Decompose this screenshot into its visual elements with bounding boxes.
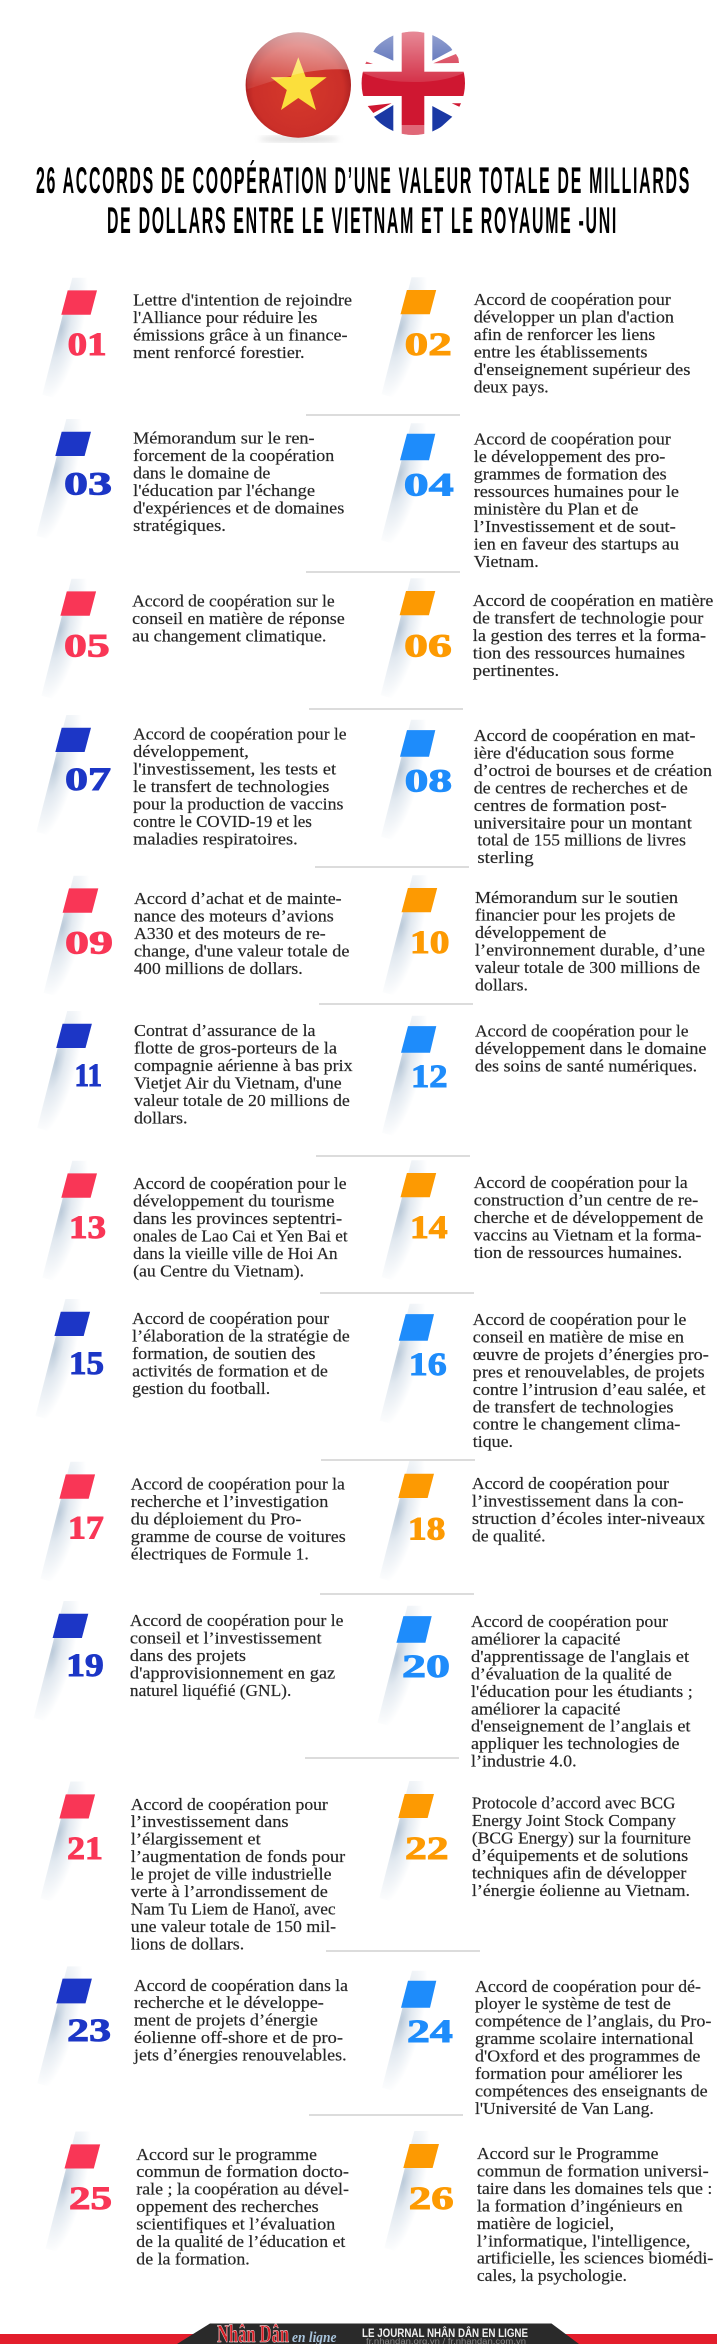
text 24: compétence de l’anglais, du Pro- bbox=[475, 2012, 712, 2031]
text 03: d'expériences et de domaines bbox=[133, 499, 344, 518]
number 13: 13 bbox=[69, 1210, 106, 1246]
agreement 25 bbox=[46, 2132, 349, 2268]
text 26: taire dans les domaines tels que : bbox=[477, 2179, 712, 2198]
agreement 05 bbox=[41, 579, 345, 701]
text 09 bbox=[134, 889, 349, 978]
flag: Vietnam bbox=[246, 28, 351, 142]
text 17: électriques de Formule 1. bbox=[131, 1544, 309, 1563]
agreement 17 bbox=[40, 1462, 346, 1584]
text 20: l'éducation pour les étudiants ; bbox=[471, 1682, 693, 1701]
marker 05 bbox=[60, 591, 96, 616]
text 15: gestion du football. bbox=[132, 1379, 270, 1398]
text 14: construction d’un centre de re- bbox=[474, 1190, 699, 1209]
text 24: compétences des enseignants de bbox=[475, 2082, 708, 2101]
text 17: du déploiement du Pro- bbox=[131, 1510, 302, 1529]
marker 01 bbox=[61, 290, 97, 315]
title bbox=[36, 160, 691, 241]
text 25: de la formation. bbox=[136, 2250, 250, 2269]
text 04 bbox=[474, 430, 680, 571]
text 02: deux pays. bbox=[474, 377, 549, 396]
marker 08 bbox=[400, 730, 435, 757]
number 23: 23 bbox=[67, 2013, 111, 2049]
text 25: de la qualité de l’éducation et bbox=[136, 2232, 346, 2251]
text 09: 400 millions de dollars. bbox=[134, 959, 303, 978]
text 26: la formation d’ingénieurs en bbox=[477, 2196, 683, 2215]
text 10: financier pour les projets de bbox=[475, 905, 675, 924]
text 21: l’augmentation de fonds pour bbox=[131, 1847, 346, 1866]
text 04: le développement des pro- bbox=[474, 447, 666, 466]
text 16: tique. bbox=[473, 1432, 513, 1451]
marker 19 bbox=[53, 1614, 88, 1638]
text 04: Vietnam. bbox=[474, 552, 539, 571]
text 08: ière d'éducation sous forme bbox=[474, 743, 674, 762]
agreement 07 bbox=[36, 715, 347, 848]
text 02: développer un plan d'action bbox=[474, 307, 675, 326]
text 04: l’Investissement et de sout- bbox=[474, 517, 676, 536]
text 10: dollars. bbox=[475, 975, 528, 994]
text 11: dollars. bbox=[134, 1108, 188, 1127]
agreement 12 bbox=[382, 1016, 706, 1138]
text 03: dans le domaine de bbox=[133, 464, 270, 483]
text 21: Accord de coopération pour bbox=[131, 1795, 328, 1814]
text 11 bbox=[134, 1021, 353, 1127]
number 18: 18 bbox=[408, 1511, 445, 1547]
text 13: Accord de coopération pour le bbox=[133, 1174, 347, 1193]
text 10: Mémorandum sur le soutien bbox=[475, 888, 679, 907]
text 02 bbox=[474, 290, 690, 396]
text 13: dans les provinces septentri- bbox=[133, 1209, 342, 1228]
agreement 24 bbox=[382, 1971, 712, 2118]
text 06: de transfert de technologie pour bbox=[473, 608, 704, 627]
text 26: l’informatique, l'intelligence, bbox=[477, 2231, 690, 2250]
text 07: l'investissement, les tests et bbox=[133, 760, 336, 779]
text 14: cherche et de développement de bbox=[474, 1208, 703, 1227]
marker 17 bbox=[59, 1474, 95, 1499]
text 18 bbox=[472, 1474, 706, 1545]
text 19: d'approvisionnement en gaz bbox=[130, 1663, 336, 1682]
text 04: ressources humaines pour le bbox=[474, 482, 679, 501]
text 18: struction d’écoles inter-niveaux bbox=[472, 1509, 706, 1528]
text 24: ployer le système de test de bbox=[475, 1994, 671, 2013]
text 21: verte à l’arrondissement de bbox=[131, 1882, 328, 1901]
text 20: d'enseignement de l’anglais et bbox=[471, 1717, 691, 1736]
text 04: ien en faveur des startups au bbox=[474, 534, 680, 553]
text 24: gramme scolaire international bbox=[475, 2029, 694, 2048]
text 16: pres et renouvelables, de projets bbox=[473, 1362, 705, 1381]
text 13: dans la vieille ville de Hoi An bbox=[133, 1244, 338, 1263]
text 14: tion de ressources humaines. bbox=[474, 1243, 682, 1262]
marker 26 bbox=[403, 2144, 439, 2168]
text 07: le transfert de technologies bbox=[133, 777, 329, 796]
text 21 bbox=[131, 1795, 346, 1953]
marker 10 bbox=[402, 888, 437, 912]
text 02: entre les établissements bbox=[474, 342, 648, 361]
text 17 bbox=[131, 1475, 346, 1564]
text 22: Energy Joint Stock Company bbox=[472, 1811, 676, 1830]
text 02: d'enseignement supérieur des bbox=[474, 360, 690, 379]
marker 22 bbox=[398, 1794, 434, 1818]
agreement 01 bbox=[42, 278, 352, 400]
agreement 14 bbox=[382, 1160, 703, 1282]
text 06: la gestion des terres et la forma- bbox=[473, 626, 706, 645]
text 22: l’énergie éolienne au Vietnam. bbox=[472, 1881, 690, 1900]
text 21: une valeur totale de 150 mil- bbox=[131, 1917, 336, 1936]
text 23: recherche et le développe- bbox=[134, 1993, 324, 2012]
text 03: Mémorandum sur le ren- bbox=[133, 429, 315, 448]
agreement 20 bbox=[377, 1606, 693, 1771]
text 20: améliorer la capacité bbox=[471, 1699, 620, 1718]
text 15: Accord de coopération pour bbox=[132, 1309, 329, 1328]
text 11: valeur totale de 20 millions de bbox=[134, 1091, 350, 1110]
text 17: gramme de course de voitures bbox=[131, 1527, 346, 1546]
text 26: Accord sur le Programme bbox=[477, 2144, 658, 2163]
text 21: l’élargissement et bbox=[131, 1830, 261, 1849]
number 06: 06 bbox=[404, 629, 452, 665]
text 22: Protocole d’accord avec BCG bbox=[472, 1794, 675, 1813]
marker 23 bbox=[56, 1979, 92, 2003]
text 23: ment de projets d’énergie bbox=[134, 2011, 318, 2030]
text 08: Accord de coopération en mat- bbox=[474, 726, 696, 745]
text 26: matière de logiciel, bbox=[477, 2214, 614, 2233]
text 07 bbox=[133, 725, 347, 848]
text 08 bbox=[474, 726, 712, 867]
number 21: 21 bbox=[67, 1831, 103, 1867]
text 05: conseil en matière de réponse bbox=[132, 609, 345, 628]
number 11: 11 bbox=[74, 1058, 102, 1094]
text 11: Contrat d’assurance de la bbox=[134, 1021, 316, 1040]
text 24: l'Université de Van Lang. bbox=[475, 2099, 654, 2118]
text 14: vaccins au Vietnam et la forma- bbox=[474, 1225, 702, 1244]
text 03 bbox=[133, 429, 344, 535]
text 22: d’équipements et de solutions bbox=[472, 1846, 688, 1865]
text 01: ment renforcé forestier. bbox=[133, 343, 305, 362]
text 22 bbox=[472, 1794, 691, 1900]
text 18: Accord de coopération pour bbox=[472, 1474, 669, 1493]
agreement 26 bbox=[384, 2131, 714, 2285]
agreement 21 bbox=[40, 1782, 346, 1953]
text 13 bbox=[133, 1174, 348, 1280]
text 07: pour la production de vaccins bbox=[133, 795, 343, 814]
text 21: Nam Tu Liem de Hanoï, avec bbox=[131, 1900, 336, 1919]
text 14: Accord de coopération pour la bbox=[474, 1173, 688, 1192]
text 20: l’industrie 4.0. bbox=[471, 1752, 577, 1771]
text 01 bbox=[133, 291, 352, 362]
number 22: 22 bbox=[405, 1831, 449, 1867]
text 21: l’investissement dans bbox=[131, 1812, 289, 1831]
text 09: change, d'une valeur totale de bbox=[134, 941, 349, 960]
footer banner bbox=[0, 2321, 717, 2344]
text 21: le projet de ville industrielle bbox=[131, 1865, 332, 1884]
text 17: recherche et l’investigation bbox=[131, 1492, 329, 1511]
marker 09 bbox=[63, 888, 98, 913]
text 16: contre le changement clima- bbox=[473, 1415, 681, 1434]
text 04: Accord de coopération pour bbox=[474, 430, 671, 449]
marker 11 bbox=[56, 1024, 92, 1048]
agreement 09 bbox=[44, 876, 349, 998]
text 25: oppement des recherches bbox=[136, 2197, 319, 2216]
text 10: développement de bbox=[475, 923, 606, 942]
text 19: Accord de coopération pour le bbox=[130, 1611, 343, 1630]
text 17: Accord de coopération pour la bbox=[131, 1475, 345, 1494]
text 07: contre le COVID-19 et les bbox=[133, 812, 312, 831]
text 12 bbox=[475, 1022, 706, 1076]
text 06: tion des ressources humaines bbox=[473, 643, 685, 662]
number 10: 10 bbox=[410, 925, 450, 961]
flag: United Kingdom bbox=[361, 31, 466, 136]
number 02: 02 bbox=[405, 327, 452, 363]
text 01: l'Alliance pour réduire les bbox=[133, 308, 317, 327]
agreement 04 bbox=[381, 423, 680, 571]
text 26 bbox=[477, 2144, 714, 2285]
text 13: onales de Lao Cai et Yen Bai et bbox=[133, 1226, 348, 1245]
marker 06 bbox=[400, 591, 435, 615]
text 25: scientifiques et l’évaluation bbox=[136, 2215, 336, 2234]
text 19 bbox=[130, 1611, 343, 1700]
text 16: Accord de coopération pour le bbox=[473, 1310, 686, 1329]
text 10 bbox=[475, 888, 705, 994]
number 15: 15 bbox=[69, 1346, 104, 1382]
marker 21 bbox=[59, 1794, 95, 1818]
text 12: développement dans le domaine bbox=[475, 1039, 706, 1058]
text 20: appliquer les technologies de bbox=[471, 1734, 679, 1753]
text 24: Accord de coopération pour dé- bbox=[475, 1977, 701, 1996]
text 04: grammes de formation des bbox=[474, 465, 667, 484]
text 09: nance des moteurs d’avions bbox=[134, 906, 334, 925]
text 22: techniques afin de développer bbox=[472, 1863, 687, 1882]
text 24: d'Oxford et des programmes de bbox=[475, 2047, 700, 2066]
marker 07 bbox=[55, 728, 91, 752]
text 23: Accord de coopération dans la bbox=[134, 1976, 348, 1995]
text 02: Accord de coopération pour bbox=[474, 290, 671, 309]
text 09: A330 et des moteurs de re- bbox=[134, 924, 326, 943]
text 23 bbox=[133, 1976, 348, 2065]
agreement 03 bbox=[36, 419, 344, 541]
text 25 bbox=[136, 2145, 349, 2268]
text 10: l’environnement durable, d’une bbox=[475, 940, 705, 959]
text 16: œuvre de projets d’énergies pro- bbox=[473, 1345, 709, 1364]
marker 14 bbox=[400, 1173, 436, 1197]
text 24: formation pour améliorer les bbox=[475, 2064, 683, 2083]
text 25: commun de formation docto- bbox=[136, 2162, 349, 2181]
text 02: afin de renforcer les liens bbox=[474, 325, 655, 344]
text 06: Accord de coopération en matière bbox=[473, 591, 713, 610]
marker 15 bbox=[54, 1312, 90, 1336]
agreement 08 bbox=[381, 720, 712, 867]
text 15: formation, de soutien des bbox=[132, 1344, 316, 1363]
text 16: de transfert de technologies bbox=[473, 1397, 673, 1416]
text 16 bbox=[473, 1310, 709, 1451]
marker 25 bbox=[64, 2144, 100, 2168]
text 01: émissions grâce à un finance- bbox=[133, 326, 348, 345]
text 15: l’élaboration de la stratégie de bbox=[132, 1326, 350, 1345]
text 26: commun de formation universi- bbox=[477, 2161, 709, 2180]
number 09: 09 bbox=[65, 925, 113, 961]
number 16: 16 bbox=[409, 1347, 447, 1383]
text 24 bbox=[475, 1977, 712, 2118]
text 05 bbox=[132, 592, 345, 646]
text 13: (au Centre du Vietnam). bbox=[133, 1261, 304, 1280]
number 01: 01 bbox=[68, 327, 107, 363]
number 07: 07 bbox=[65, 762, 111, 798]
text 03: stratégiques. bbox=[133, 516, 226, 535]
agreement 10 bbox=[382, 875, 705, 997]
text 20: améliorer la capacité bbox=[471, 1629, 620, 1648]
agreement 22 bbox=[379, 1781, 691, 1903]
agreement 13 bbox=[42, 1161, 348, 1283]
text 21: lions de dollars. bbox=[131, 1934, 244, 1953]
marker 13 bbox=[61, 1173, 97, 1198]
number 05: 05 bbox=[64, 629, 110, 665]
text 20: Accord de coopération pour bbox=[471, 1612, 668, 1631]
text 05: Accord de coopération sur le bbox=[132, 592, 335, 611]
text 03: forcement de la coopération bbox=[133, 446, 335, 465]
number 14: 14 bbox=[410, 1210, 448, 1246]
text 03: l'éducation par l'échange bbox=[133, 481, 315, 500]
number 26: 26 bbox=[409, 2181, 454, 2217]
text 18: l’investissement dans la con- bbox=[472, 1491, 684, 1510]
text 08: total de 155 millions de livres bbox=[477, 831, 686, 850]
text 19: naturel liquéfié (GNL). bbox=[130, 1681, 291, 1700]
text 26: artificielle, les sciences biomédi- bbox=[477, 2249, 714, 2268]
number 19: 19 bbox=[66, 1648, 104, 1684]
text 10: valeur totale de 300 millions de bbox=[475, 958, 700, 977]
text 08: centres de formation post- bbox=[474, 796, 667, 815]
marker 20 bbox=[396, 1616, 432, 1643]
footer title: LE JOURNAL NHÂN DÂN EN LIGNE bbox=[362, 2325, 528, 2340]
agreement 16 bbox=[380, 1304, 709, 1451]
text 06: pertinentes. bbox=[473, 661, 559, 680]
text 11: Vietjet Air du Vietnam, d'une bbox=[134, 1073, 342, 1092]
marker 24 bbox=[401, 1981, 436, 2008]
number 04: 04 bbox=[404, 468, 454, 504]
agreement 18 bbox=[379, 1461, 706, 1583]
text 26: cales, la psychologie. bbox=[477, 2266, 627, 2285]
text 20: d'apprentissage de l'anglais et bbox=[471, 1647, 689, 1666]
number 17: 17 bbox=[68, 1511, 104, 1547]
text 25: Accord sur le programme bbox=[136, 2145, 317, 2164]
agreement 02 bbox=[382, 277, 690, 399]
text 01: Lettre d'intention de rejoindre bbox=[133, 291, 352, 310]
text 16: conseil en matière de mise en bbox=[473, 1327, 685, 1346]
number 24: 24 bbox=[407, 2014, 453, 2050]
text 11: compagnie aérienne à bas prix bbox=[134, 1056, 353, 1075]
text 20 bbox=[471, 1612, 693, 1771]
text 07: Accord de coopération pour le bbox=[133, 725, 347, 744]
marker 18 bbox=[398, 1474, 434, 1498]
text 23: éolienne off-shore et de pro- bbox=[134, 2028, 343, 2047]
text 16: contre l’intrusion d’eau salée, et bbox=[473, 1380, 706, 1399]
number 25: 25 bbox=[69, 2181, 112, 2217]
text 09: Accord d’achat et de mainte- bbox=[134, 889, 342, 908]
text 07: développement, bbox=[133, 742, 249, 761]
agreement 11 bbox=[37, 1011, 353, 1133]
marker 03 bbox=[55, 432, 91, 456]
text 05: au changement climatique. bbox=[132, 627, 326, 646]
text 12: Accord de coopération pour le bbox=[475, 1022, 688, 1041]
agreement 23 bbox=[37, 1966, 348, 2088]
text 07: maladies respiratoires. bbox=[133, 829, 298, 848]
number 12: 12 bbox=[411, 1059, 448, 1095]
marker 16 bbox=[399, 1314, 434, 1341]
text 06 bbox=[473, 591, 713, 680]
text 14 bbox=[474, 1173, 703, 1262]
number 20: 20 bbox=[402, 1649, 450, 1685]
text 08: de centres de recherches et de bbox=[474, 778, 688, 797]
text 15 bbox=[132, 1309, 350, 1398]
text 23: jets d’énergies renouvelables. bbox=[133, 2046, 347, 2065]
text 13: développement du tourisme bbox=[133, 1191, 334, 1210]
agreement 15 bbox=[35, 1299, 350, 1421]
text 19: dans des projets bbox=[130, 1646, 246, 1665]
text 08: sterling bbox=[477, 848, 534, 867]
text 22: (BCG Energy) sur la fourniture bbox=[472, 1829, 691, 1848]
text 11: flotte de gros-porteurs de la bbox=[134, 1038, 337, 1057]
text 20: d’évaluation de la qualité de bbox=[471, 1664, 672, 1683]
agreement 19 bbox=[34, 1601, 343, 1723]
text 25: rale ; la coopération au dével- bbox=[136, 2180, 349, 2199]
text 08: d’octroi de bourses et de création bbox=[474, 761, 712, 780]
marker 04 bbox=[400, 434, 435, 460]
text 08: universitaire pour un montant bbox=[474, 813, 692, 832]
text 15: activités de formation et de bbox=[132, 1361, 328, 1380]
number 03: 03 bbox=[64, 466, 112, 502]
text 04: ministère du Plan et de bbox=[474, 500, 638, 519]
agreement 06 bbox=[381, 578, 713, 700]
marker 02 bbox=[400, 290, 436, 314]
text 18: de qualité. bbox=[472, 1526, 545, 1545]
text 12: des soins de santé numériques. bbox=[475, 1057, 697, 1076]
text 19: conseil et l’investissement bbox=[130, 1628, 322, 1647]
number 08: 08 bbox=[405, 763, 452, 799]
marker 12 bbox=[401, 1026, 436, 1053]
